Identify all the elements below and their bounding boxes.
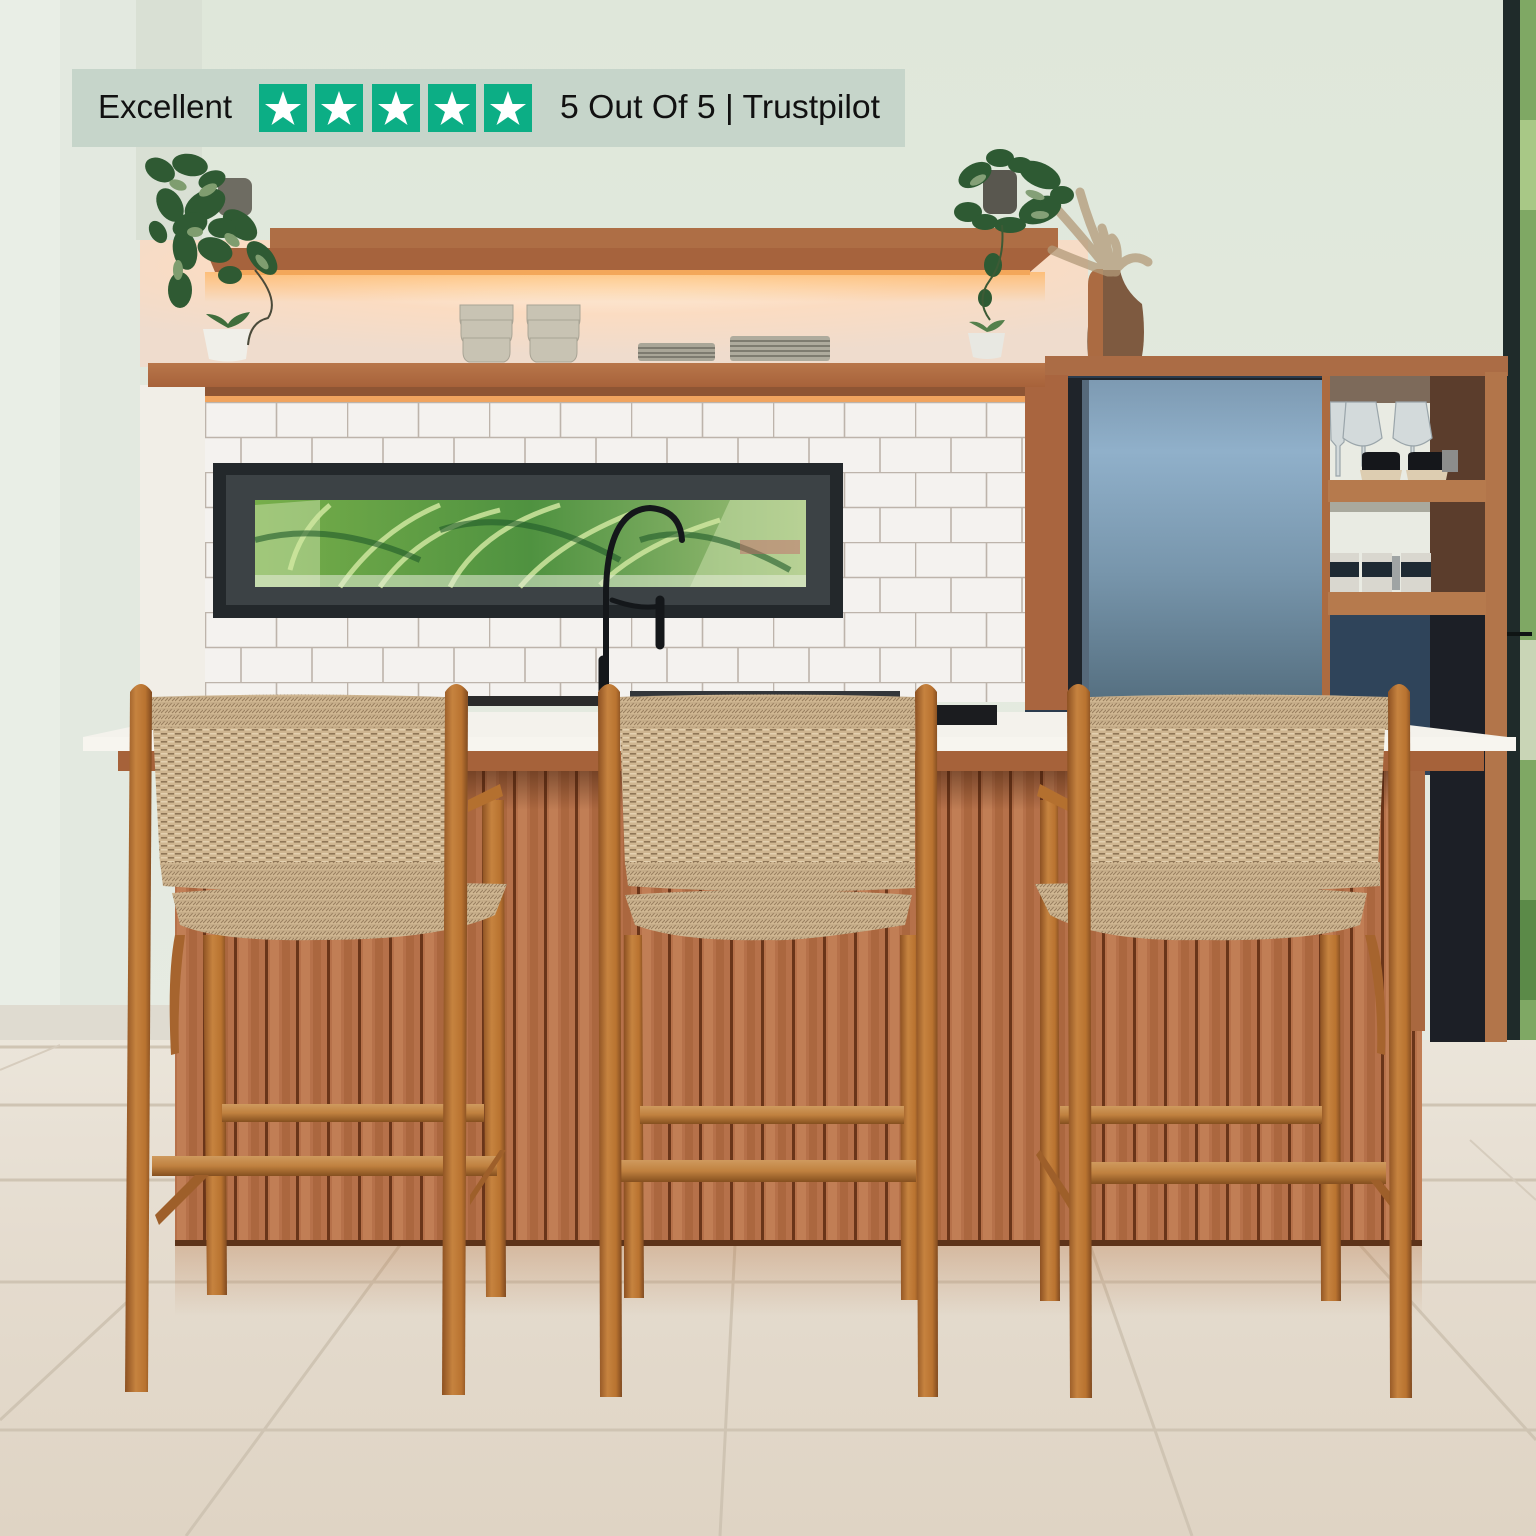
vase with pampas grass: [1052, 192, 1148, 356]
label: rating source: 5 Out Of 5 | Trustpilot: [560, 88, 880, 125]
seat: [625, 890, 912, 940]
woven backrest: [618, 694, 915, 892]
rear legs and rungs: [620, 935, 920, 1300]
floor tiles: [0, 1040, 1536, 1536]
rear legs and rungs: [1036, 784, 1405, 1301]
front posts: [125, 684, 152, 1392]
wall background: [0, 0, 1536, 1060]
slatted teak island: [118, 750, 1484, 1246]
bar stool: centre: [598, 684, 938, 1397]
rear legs and rungs: [152, 784, 506, 1297]
right hanging plant: [954, 149, 1074, 320]
marble countertop with sink and hob: [83, 691, 1516, 751]
front posts: [1067, 684, 1092, 1398]
seat: [1035, 883, 1367, 940]
label: Excellent: Excellent: [98, 88, 232, 125]
window with garden view: [213, 463, 843, 618]
upper floating wood shelf: [205, 228, 1058, 275]
bar stool: left: [125, 684, 507, 1395]
small white potted plants: [203, 312, 1005, 362]
speckled cups: [1329, 553, 1431, 592]
stainless steel fridge: [1068, 378, 1322, 708]
black and cream mugs: [1360, 450, 1458, 480]
left hanging plant: [141, 151, 283, 345]
woven backrest: [1088, 694, 1390, 892]
outdoor door frame at right: [1503, 0, 1536, 1040]
under-shelf light glow: [140, 240, 1088, 367]
rating badge: [72, 69, 905, 147]
bar stool: right: [1035, 684, 1412, 1398]
cabinet: fridge and open shelving: [1025, 356, 1508, 1042]
wood frame: [1025, 356, 1508, 1042]
open shelves back panels: [1328, 375, 1485, 1042]
ceramic bowls: [460, 305, 580, 362]
black spring faucet: [603, 508, 682, 700]
seat: [172, 883, 507, 940]
lower floating wood shelf: [148, 363, 1045, 402]
white subway tile backsplash: [205, 402, 1025, 702]
woven backrest: [150, 694, 447, 892]
wine glasses: [1330, 402, 1432, 476]
front posts: [598, 684, 622, 1397]
five Trustpilot stars: [259, 84, 532, 132]
stacked plates: [638, 336, 830, 361]
